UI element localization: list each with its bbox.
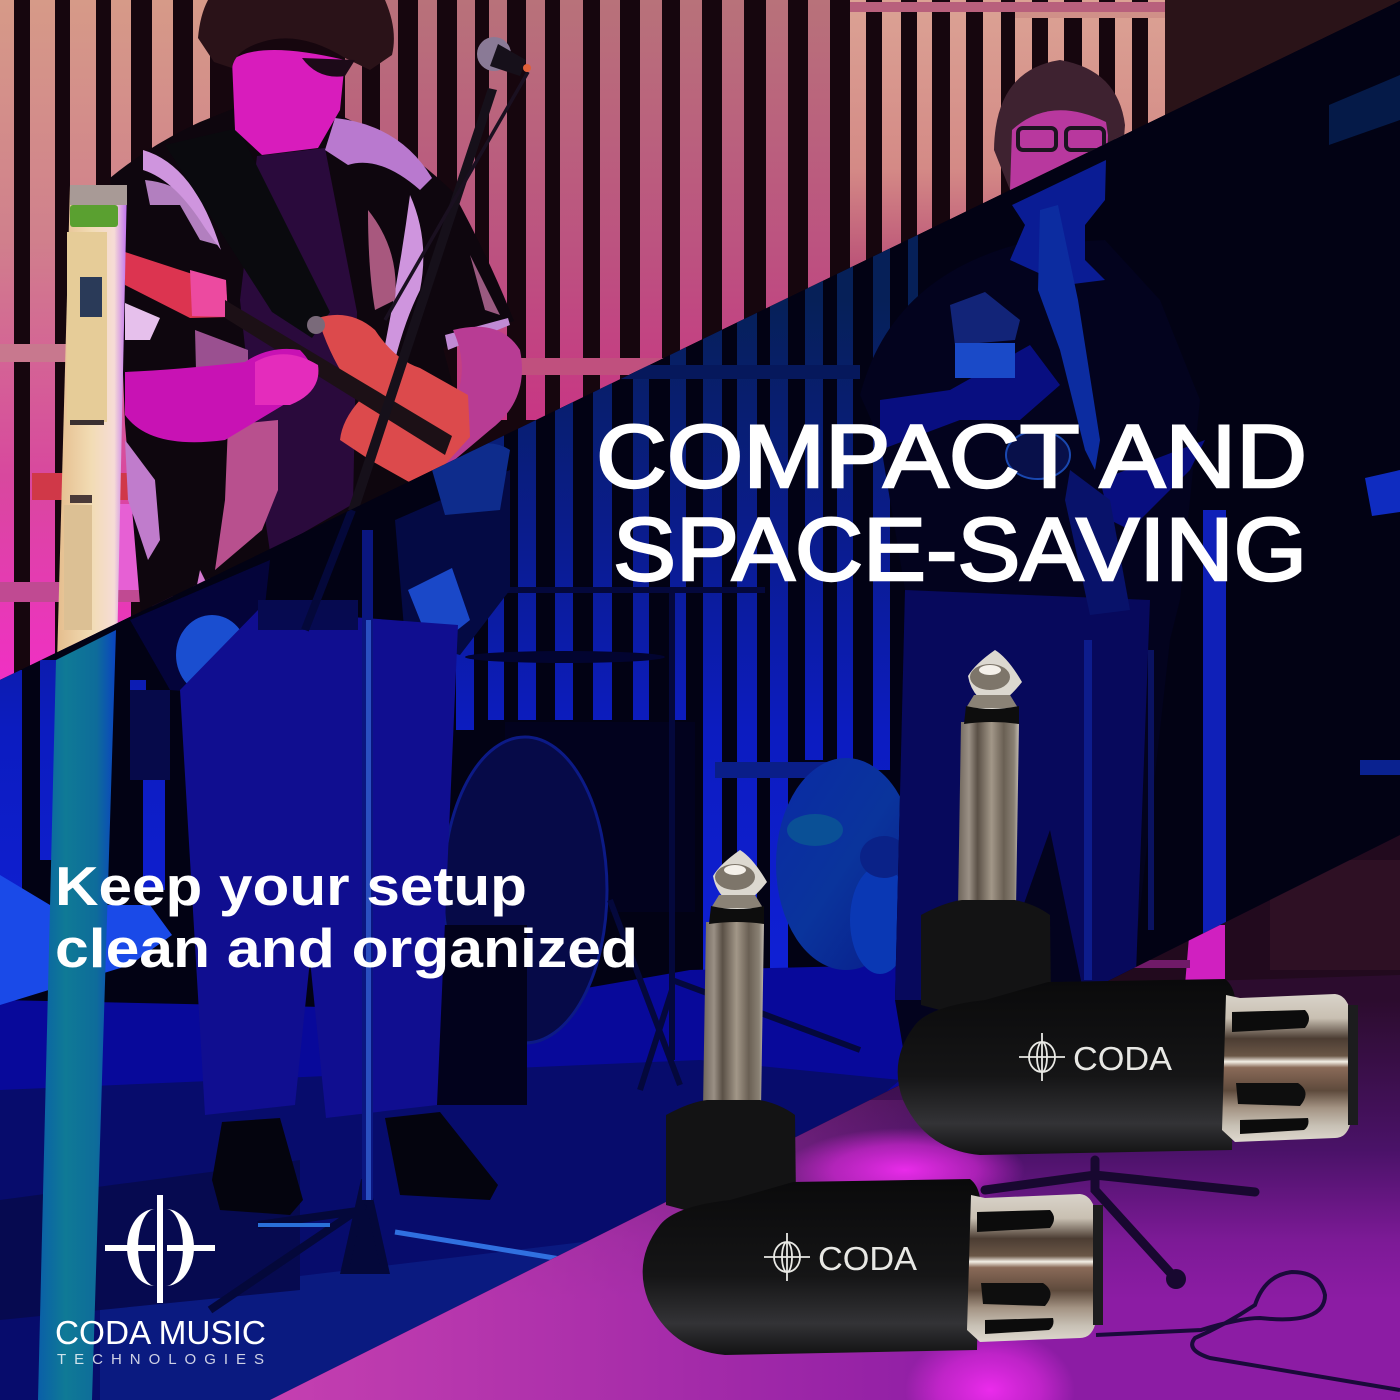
microphone and boom [348,88,497,512]
guitarist shirt [110,108,514,640]
logo tagline: TECHNOLOGIES [57,1351,264,1368]
icon: rear CODA jack plug: CODA [1073,1040,1172,1077]
hi-hat and cymbal stand [470,590,860,1090]
guitarist left arm [125,349,312,442]
sax player trousers [895,590,1150,1000]
sax player body [860,240,1200,1060]
icon: crosshair mark [105,1195,215,1303]
guitarist right forearm [444,326,522,465]
guitar headstock [125,252,228,318]
logo: Coda Music Technologies [55,1195,266,1368]
bass drum [443,737,607,1043]
right stand pillar [1203,510,1226,980]
subheading: Keep your setup [55,855,527,917]
guitarist strap [190,164,330,338]
subheading: clean and organized [55,917,638,979]
amp box [437,925,527,1105]
guitarist shirt leaf pattern [125,118,510,620]
strap button [307,316,325,334]
paper sheet [0,875,172,1005]
logo wordmark: CODA MUSIC [55,1314,266,1351]
microphone stand [210,510,385,1310]
cymbals [776,758,900,970]
stand legs on floor [985,1160,1255,1278]
blue wall slats [0,230,918,970]
hand over guitar [432,443,510,515]
cat print [950,292,1020,345]
keyboard stand behind tube [32,473,132,500]
guitarist t-shirt [240,148,357,552]
guitarist hair [198,0,394,70]
saxophone [1038,205,1100,470]
title [596,406,1307,599]
sax player arms [880,345,1060,450]
drum shell [505,722,695,912]
icon: rear CODA jack plug [898,650,1358,1155]
stage floor [0,966,903,1242]
icon: front CODA jack plug: CODA [818,1240,917,1277]
panel: top stage wall in pink light [0,0,1400,700]
guitar body [318,315,470,487]
guitarist neck and face [232,50,345,155]
title: COMPACT AND [596,406,1307,506]
sunglasses [302,58,355,77]
guitar neck [225,300,452,455]
guitarist trousers [180,610,458,1118]
top-right shadow strip [1329,75,1400,145]
guitarist lower shirt [130,560,270,697]
tube bottom [38,630,116,1400]
icon: front CODA jack plug [643,850,1103,1355]
sax player face and neck [1010,160,1106,285]
title: SPACE-SAVING [613,499,1307,599]
paper in pocket [955,343,1015,378]
guitarist shoes [212,1118,303,1215]
subheading [55,855,638,979]
cable on floor [1096,1272,1400,1390]
sax player head top [994,60,1125,190]
tube top [57,186,127,652]
right device [1365,470,1400,516]
